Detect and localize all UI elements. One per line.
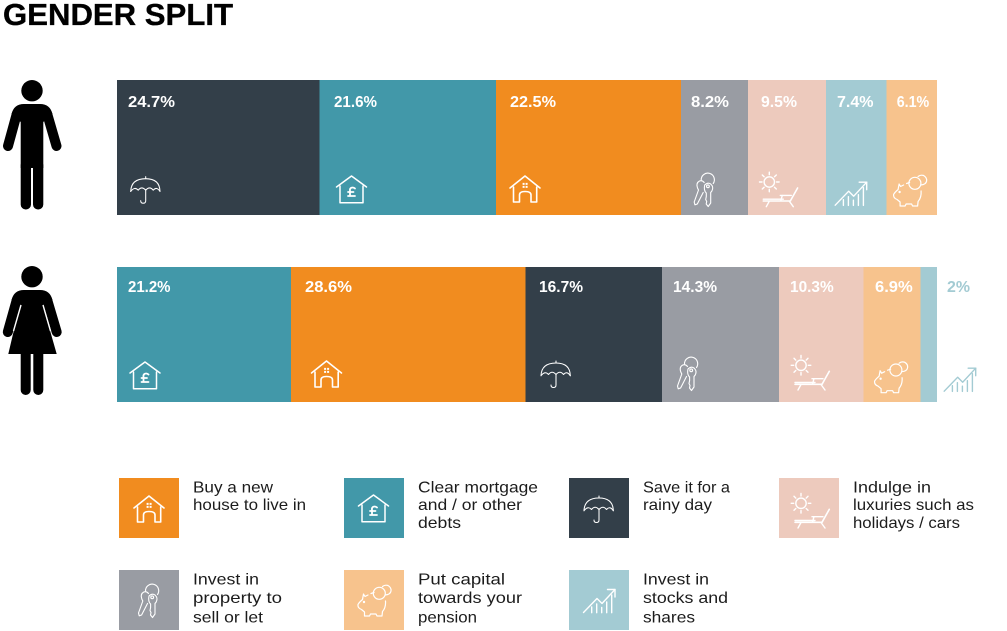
segment: pension 6.9%: 6.9% bbox=[875, 279, 913, 296]
legend item: stocks and shares bbox=[569, 570, 728, 630]
segment: invest in property 14.3% bbox=[662, 267, 779, 402]
legend item: indulge in luxuries bbox=[779, 478, 974, 538]
segment: save it for a rainy day 16.7% bbox=[526, 267, 662, 402]
legend item: buy a new house: Buy a new bbox=[193, 480, 273, 497]
legend item: pension: pension bbox=[418, 610, 477, 627]
bar: male bbox=[117, 80, 937, 215]
legend item: stocks and shares: stocks and bbox=[643, 590, 728, 607]
segment: save it for a rainy day 24.7% bbox=[117, 80, 320, 215]
segment: save it for a rainy day 16.7%: 16.7% bbox=[539, 279, 583, 296]
legend item: pension: Put capital bbox=[418, 572, 505, 588]
legend item: clear mortgage bbox=[344, 478, 538, 538]
segment: invest in property 8.2%: 8.2% bbox=[691, 94, 729, 111]
segment: clear mortgage 21.6% bbox=[320, 80, 496, 215]
segment: clear mortgage 21.2% bbox=[117, 267, 291, 402]
segment: luxuries 9.5%: 9.5% bbox=[761, 94, 797, 111]
legend item: invest in property: sell or let bbox=[193, 610, 264, 627]
segment: pension 6.1%: 6.1% bbox=[897, 94, 929, 111]
icon: female figure bbox=[8, 266, 57, 395]
legend item: indulge in luxuries: Indulge in bbox=[853, 480, 931, 497]
segment: stocks 2% bbox=[920, 267, 976, 402]
legend item: invest in property: Invest in bbox=[193, 572, 259, 588]
legend item: clear mortgage: debts bbox=[418, 515, 461, 532]
segment: stocks 7.4%: 7.4% bbox=[837, 94, 874, 111]
legend item: save it for a rainy day bbox=[569, 478, 730, 538]
legend item: clear mortgage: and / or other bbox=[418, 497, 523, 514]
legend item: pension bbox=[344, 570, 523, 630]
legend bbox=[119, 478, 974, 630]
legend item: pension: towards your bbox=[418, 590, 523, 607]
segment: pension 6.1% bbox=[886, 80, 937, 215]
legend item: indulge in luxuries: luxuries such as bbox=[853, 497, 974, 514]
segment: stocks 7.4% bbox=[826, 80, 886, 215]
segment: pension 6.9% bbox=[864, 267, 920, 402]
segment: luxuries 9.5% bbox=[748, 80, 826, 215]
segment: buy a new house 28.6% bbox=[291, 267, 526, 402]
segment: clear mortgage 21.6%: 21.6% bbox=[334, 94, 377, 111]
legend item: buy a new house bbox=[119, 478, 306, 538]
legend item: indulge in luxuries: holidays / cars bbox=[853, 515, 960, 532]
segment: save it for a rainy day 24.7%: 24.7% bbox=[128, 94, 175, 111]
legend item: buy a new house: house to live in bbox=[193, 497, 306, 514]
segment: luxuries 10.3% bbox=[779, 267, 864, 402]
legend item: invest in property bbox=[119, 570, 282, 630]
segment: invest in property 14.3%: 14.3% bbox=[673, 279, 717, 296]
segment: buy a new house 22.5%: 22.5% bbox=[510, 94, 556, 111]
legend item: save it for a rainy day: rainy day bbox=[643, 497, 712, 514]
legend item: stocks and shares: Invest in bbox=[643, 572, 709, 588]
segment: clear mortgage 21.2%: 21.2% bbox=[128, 279, 171, 296]
legend item: save it for a rainy day: Save it for a bbox=[643, 480, 730, 497]
segment: stocks 2%: 2% bbox=[947, 279, 970, 296]
legend item: invest in property: property to bbox=[193, 590, 282, 607]
segment: buy a new house 22.5% bbox=[496, 80, 681, 215]
legend item: stocks and shares: shares bbox=[643, 610, 695, 627]
bar: female bbox=[117, 267, 976, 402]
icon: male figure bbox=[8, 80, 56, 210]
segment: buy a new house 28.6%: 28.6% bbox=[305, 279, 352, 296]
segment: luxuries 10.3%: 10.3% bbox=[790, 279, 834, 296]
legend item: clear mortgage: Clear mortgage bbox=[418, 480, 538, 497]
segment: invest in property 8.2% bbox=[681, 80, 748, 215]
